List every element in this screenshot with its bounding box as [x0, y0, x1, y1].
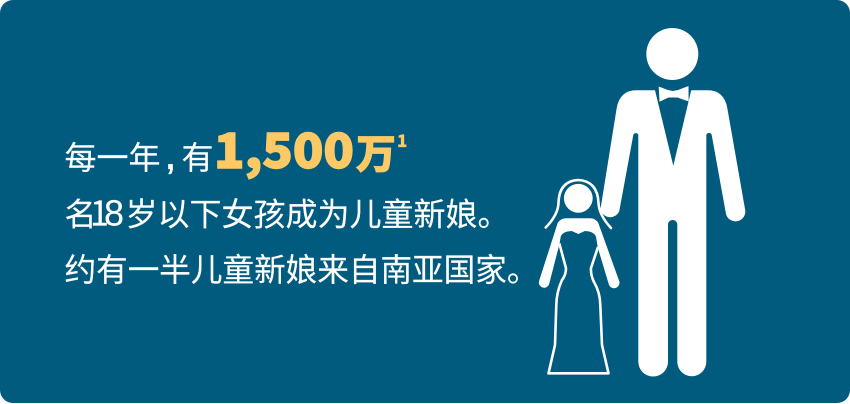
statistic: 1,500万: [214, 112, 407, 182]
statistic: 1,500万: 1: [397, 127, 407, 152]
line 1 lead-in: ,: [166, 140, 175, 176]
line 1 lead-in: 每一年: [64, 133, 161, 179]
icon: bride: [539, 180, 619, 373]
line 2: 1: [90, 186, 109, 236]
line 1 lead-in: 有: [182, 133, 214, 179]
groom bow tie: [659, 86, 689, 102]
bride dress outline: [548, 243, 608, 373]
statistic: 1,500万: 1,500: [214, 112, 354, 182]
line 2: 岁以下女孩成为儿童新娘。: [126, 190, 510, 236]
bride bodice and arms: [539, 218, 619, 288]
bride veil: [546, 180, 611, 228]
line 2: 名: [64, 190, 97, 236]
icon: groom: [600, 28, 745, 377]
groom body: [600, 90, 745, 377]
line 3: 约有一半儿童新娘来自南亚国家。: [64, 245, 538, 291]
statistic: 1,500万: 万: [356, 122, 396, 180]
line 2: 8: [104, 192, 124, 234]
groom head: [646, 28, 698, 80]
bride head: [564, 184, 593, 213]
headline text block: [64, 112, 538, 291]
